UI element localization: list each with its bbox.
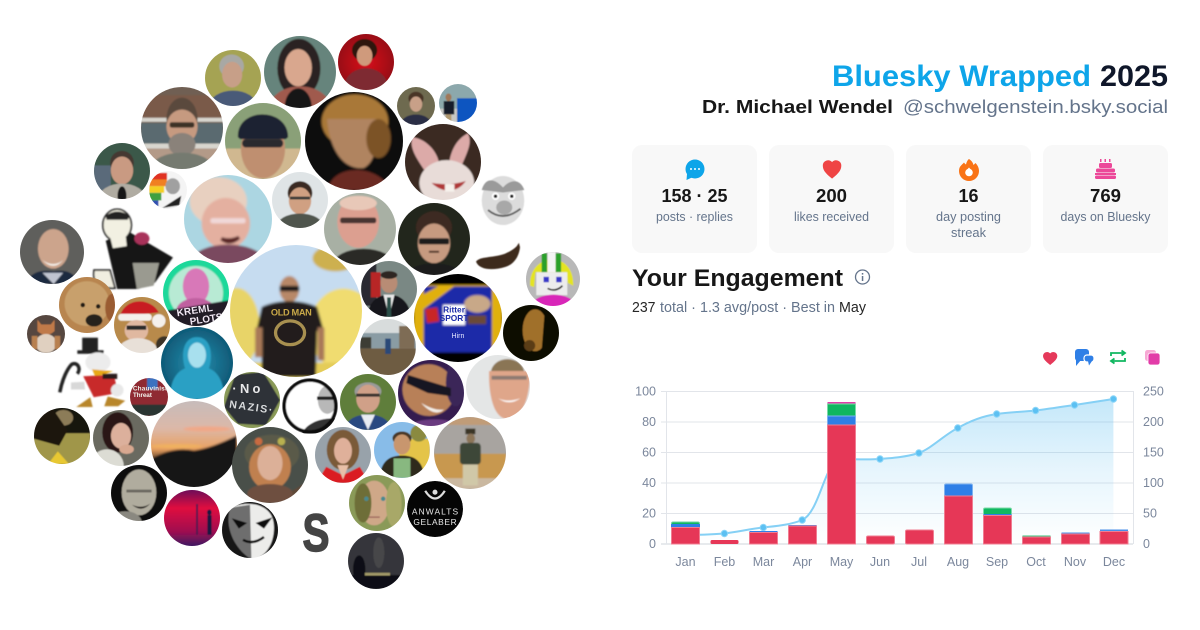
month labels: Nov: [1064, 555, 1087, 569]
avatar: small man glasses: [397, 87, 435, 125]
heading: Your Engagement: Your Engagement: [632, 265, 843, 292]
avatar: No Nazis umbrella: [224, 372, 280, 428]
avatar: Scrooge figure: [60, 338, 125, 407]
icon: speech bubble: [686, 160, 704, 180]
avatar: Guy Fawkes mask: [222, 502, 278, 558]
engagement summary: total · 1.3 avg/post · Best in: [660, 300, 835, 316]
month labels: Aug: [947, 555, 969, 569]
title: 2025: [1100, 60, 1168, 93]
month labels: Mar: [753, 555, 774, 569]
bar: Oct: [1022, 536, 1050, 544]
avatar: smiling man: [466, 355, 530, 419]
avatar: woman hand on chin: [93, 410, 149, 466]
avatar: man glasses moustache: [398, 203, 470, 275]
profile name and handle: Dr. Michael Wendel: [702, 96, 893, 117]
avatar: figure in wheat field: [427, 410, 513, 496]
panel: day posting streak: 16: [958, 185, 978, 206]
bar: Jul: [906, 530, 934, 544]
icon: birthday cake: [1095, 159, 1116, 179]
month labels: Apr: [793, 555, 812, 569]
icon: likes heart: [1043, 352, 1057, 365]
profile name and handle: [702, 96, 1168, 117]
avatar: yellow road selfie: [34, 408, 90, 464]
panel: posts and replies: [632, 145, 757, 253]
panel: days on Bluesky: 769: [1090, 185, 1121, 206]
cumulative area: [686, 399, 1113, 544]
bar: Jan: [672, 522, 700, 544]
avatar: man in blue suit: [340, 374, 396, 430]
avatar: santa hat: [114, 297, 170, 353]
avatar: sunset: [151, 401, 237, 487]
avatar: politician with flag: [361, 261, 417, 317]
icon: reposts: [1111, 350, 1125, 364]
left axis labels: [635, 384, 656, 551]
avatar: woman dark hair: [264, 36, 336, 108]
chart legend: [1043, 349, 1160, 366]
panel: posts and replies: posts · replies: [656, 210, 733, 224]
avatar: woman red background: [338, 34, 394, 90]
avatar: blue hoodie: [161, 327, 233, 399]
icon: flame: [959, 159, 979, 181]
avatar: beanie and sunglasses: [225, 103, 301, 179]
left axis labels: 80: [642, 415, 656, 429]
avatar: tilted glasses purple: [398, 360, 464, 426]
avatar: elderly man black and white: [111, 465, 167, 521]
profile name and handle: @schwelgenstein.bsky.social: [903, 96, 1168, 117]
avatar: bearded man bookshelf: [141, 87, 223, 169]
left axis labels: 100: [635, 384, 656, 398]
month labels: [675, 555, 1125, 569]
bar: Sep: [984, 508, 1012, 544]
bar: Nov: [1062, 532, 1090, 544]
avatar: bald man: [20, 220, 84, 284]
icon: info: [856, 270, 870, 284]
icon: replies: [1075, 349, 1094, 366]
bar: Jun: [866, 536, 894, 544]
avatar: tuxedo cartoon: [94, 209, 173, 289]
panel: day posting streak: streak: [951, 226, 987, 240]
panel: day posting streak: [906, 145, 1031, 253]
combined bar and line chart: [635, 384, 1164, 569]
avatar: Kreml Plots: [163, 260, 229, 326]
left axis labels: 20: [642, 506, 656, 520]
panel: likes received: 200: [816, 185, 847, 206]
avatar: The Chauvinist Threat: [130, 378, 168, 416]
engagement summary: May: [839, 300, 867, 316]
panel: likes received: [769, 145, 894, 253]
bar: Feb: [710, 540, 738, 544]
panel: likes received: likes received: [794, 210, 869, 224]
bar: Aug: [944, 484, 972, 544]
avatar: older man in glasses: [324, 193, 396, 265]
right axis labels: [1143, 384, 1164, 551]
avatar: smiling glasses man: [272, 172, 328, 228]
avatar: blonde woman red blazer: [309, 421, 377, 489]
right axis labels: 150: [1143, 446, 1164, 460]
grid and axes: [661, 391, 1134, 544]
avatar: muscular shiba: [27, 315, 65, 353]
avatar: man blue sign: [439, 84, 477, 122]
right axis labels: 100: [1143, 476, 1164, 490]
avatar: night sky: [342, 527, 410, 595]
avatar: dark shadow face: [497, 299, 565, 367]
panel: days on Bluesky: [1043, 145, 1168, 253]
month labels: May: [830, 555, 854, 569]
bar: May: [828, 402, 856, 544]
avatar: Tyrion portrait: [305, 92, 403, 190]
month labels: Jun: [870, 555, 890, 569]
bar: Dec: [1100, 530, 1128, 544]
avatar: Statler puppet: [482, 176, 524, 225]
month labels: Feb: [714, 555, 735, 569]
avatar: grey-haired man: [205, 50, 261, 106]
left axis labels: 60: [642, 446, 656, 460]
engagement summary: 237: [632, 300, 656, 316]
avatar: rainbow sketch: [149, 171, 187, 209]
title: Bluesky Wrapped: [832, 60, 1091, 93]
avatar: dried pepper: [476, 243, 520, 269]
left axis labels: 0: [649, 537, 656, 551]
avatar: man in blazer: [94, 143, 150, 199]
line points: [721, 396, 1117, 537]
right axis labels: 200: [1143, 415, 1164, 429]
avatar: elderly lady: [184, 175, 272, 263]
avatar: main profile man in yellow foliage: [230, 245, 362, 377]
month labels: Sep: [986, 555, 1008, 569]
avatar: S logo: S: [302, 504, 330, 563]
avatar: blonde woman blurred: [343, 469, 411, 537]
panel: posts and replies: 158 · 25: [662, 185, 728, 206]
left axis labels: 40: [642, 476, 656, 490]
avatar: grinning rabbit: [405, 124, 481, 200]
avatar: Anwalts Gelaber logo: [407, 481, 463, 537]
avatar: golden doodle: [59, 277, 115, 333]
stacked bars: [672, 402, 1128, 544]
panel: day posting streak: day posting: [936, 210, 1001, 224]
avatar: black and white ring man: [282, 378, 338, 434]
avatar: Ritter Sport brain chocolate: [414, 274, 502, 362]
icon: quotes: [1145, 350, 1160, 365]
avatar: red neon street: [164, 490, 220, 546]
month labels: Jul: [911, 555, 927, 569]
panel: days on Bluesky: days on Bluesky: [1060, 210, 1151, 224]
bar: Mar: [750, 531, 778, 544]
bar: Apr: [788, 525, 816, 544]
avatar cloud: [14, 28, 585, 595]
month labels: Jan: [675, 555, 696, 569]
avatar: man by lake: [360, 319, 416, 375]
right axis labels: 50: [1143, 506, 1157, 520]
icon: heart: [823, 160, 841, 179]
right axis labels: 250: [1143, 384, 1164, 398]
avatar: Botticelli Flora: [232, 427, 308, 503]
avatar: man floral jacket: [368, 416, 436, 484]
avatar: pixel art helmet: [526, 252, 580, 306]
cumulative line: [686, 399, 1113, 535]
month labels: Dec: [1103, 555, 1125, 569]
month labels: Oct: [1026, 555, 1046, 569]
right axis labels: 0: [1143, 537, 1150, 551]
